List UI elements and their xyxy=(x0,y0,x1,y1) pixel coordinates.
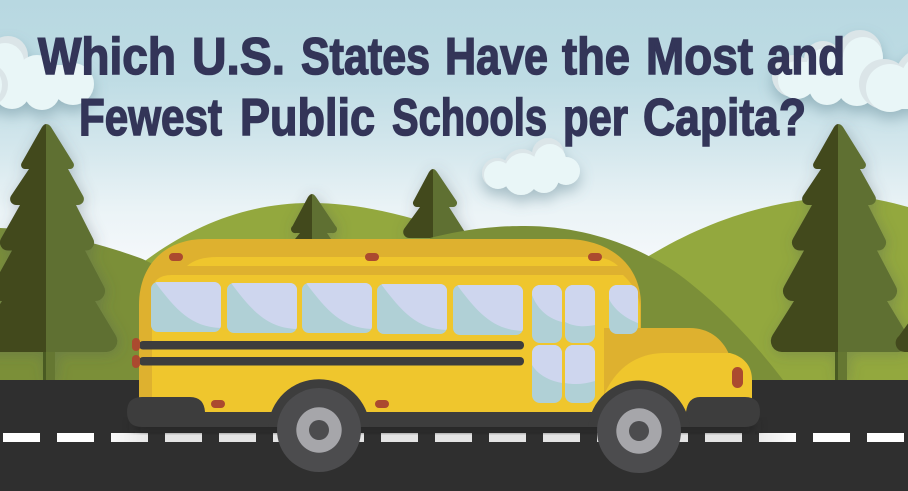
road centre dashes xyxy=(3,433,904,442)
tree at right edge xyxy=(896,318,908,352)
centre dark hill xyxy=(430,226,783,380)
right pine tree xyxy=(771,124,908,380)
front bumper xyxy=(686,397,760,427)
left pine tree xyxy=(0,124,117,380)
door window lower right xyxy=(565,345,595,403)
title: per xyxy=(563,89,628,147)
bus side panel xyxy=(152,275,640,412)
left cloud xyxy=(0,36,94,110)
right light hill xyxy=(620,197,908,380)
title xyxy=(38,28,845,147)
bus shadow xyxy=(135,420,755,432)
front window xyxy=(609,285,638,334)
red lower markers xyxy=(211,400,389,408)
title: Fewest xyxy=(79,89,222,147)
title: Most xyxy=(646,28,753,86)
front wheel xyxy=(588,381,690,473)
bus hood upper xyxy=(604,328,729,412)
school bus xyxy=(127,239,760,473)
title: States xyxy=(301,28,430,86)
side stripes xyxy=(139,341,524,366)
title: Schools xyxy=(392,89,547,147)
left dark hill xyxy=(0,228,210,380)
sky background xyxy=(0,0,908,260)
window 3 xyxy=(302,283,372,333)
road xyxy=(0,380,908,491)
right cloud xyxy=(772,30,908,112)
title: Public xyxy=(240,89,375,147)
red headlight xyxy=(732,367,743,388)
bus hood lower xyxy=(598,353,752,412)
middle light hill xyxy=(100,203,480,380)
door window lower left xyxy=(532,345,562,403)
window 1 xyxy=(151,282,221,332)
rear bumper xyxy=(127,397,205,427)
title: Have xyxy=(445,28,548,86)
window 5 xyxy=(453,285,523,335)
bus roof stripe xyxy=(187,257,618,266)
title: Capita? xyxy=(643,89,806,147)
red rear lights xyxy=(132,338,140,368)
small tree behind bus xyxy=(290,194,337,245)
door window upper left xyxy=(532,285,562,343)
title: the xyxy=(562,28,630,86)
window 4 xyxy=(377,284,447,334)
title: and xyxy=(767,28,845,86)
bus body dark shell xyxy=(139,239,641,412)
title: U.S. xyxy=(192,28,285,86)
window 2 xyxy=(227,283,297,333)
title: Which xyxy=(38,28,176,86)
rear wheel xyxy=(268,379,370,472)
medium tree behind bus xyxy=(403,169,470,240)
door window upper right xyxy=(565,285,595,343)
red roof markers xyxy=(169,253,602,261)
lower chassis band xyxy=(150,412,730,427)
small centre cloud xyxy=(482,138,580,195)
